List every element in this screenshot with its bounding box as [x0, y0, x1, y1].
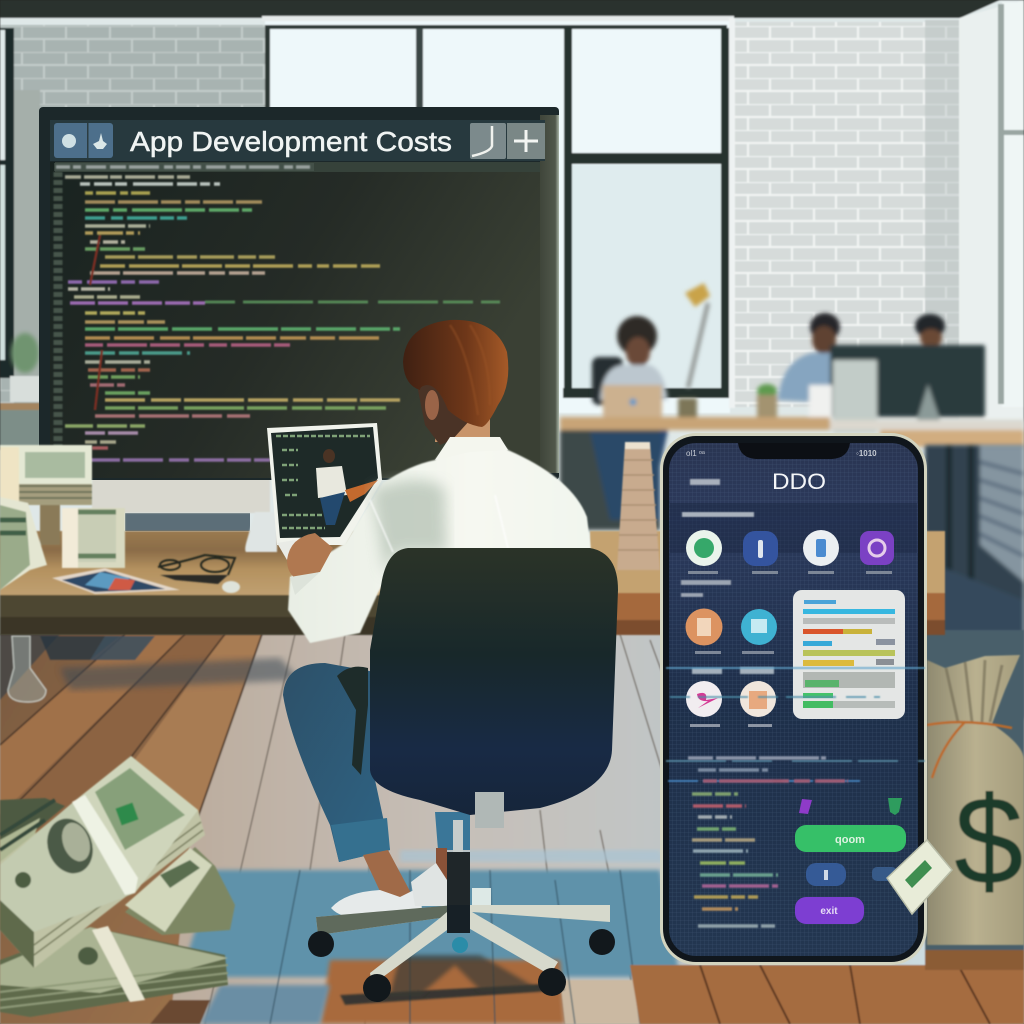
paper cup stack — [617, 442, 660, 570]
third coworker — [915, 314, 945, 347]
chair arm — [337, 667, 368, 775]
darker wood planks left — [0, 634, 262, 1024]
far monitor — [830, 345, 985, 417]
money stacks foreground — [0, 756, 235, 1017]
middle stack — [125, 847, 235, 935]
blue button — [806, 863, 846, 886]
main desk — [0, 531, 945, 635]
smartphone: ◦1010 — [856, 449, 877, 458]
monitor with code editor — [39, 107, 559, 480]
banknote leaning on phone — [887, 840, 952, 914]
person from behind — [267, 320, 618, 1002]
back dark stack — [0, 798, 65, 840]
feature badges row — [799, 798, 902, 815]
monitor stand — [92, 478, 277, 552]
desk lamp — [685, 283, 710, 388]
shoes — [331, 887, 422, 918]
title bar — [50, 120, 545, 161]
scan glitch lines — [666, 668, 925, 781]
green button — [795, 825, 906, 852]
head — [418, 380, 470, 445]
magazine, glasses and mouse — [52, 555, 240, 594]
green button: qoom — [835, 834, 865, 846]
window shadow band — [60, 658, 300, 690]
code text — [56, 167, 500, 465]
right lower wall and dark floor — [925, 445, 1024, 720]
blue shadow on floor — [180, 870, 680, 977]
left pillar — [14, 90, 40, 410]
phone code lines — [688, 758, 848, 926]
top stack — [0, 756, 205, 968]
ceiling — [0, 0, 1000, 18]
cup and plant — [678, 398, 697, 417]
bottom stack — [0, 927, 228, 1017]
shirt — [288, 438, 592, 643]
wood floor — [0, 630, 1024, 1024]
money bag — [927, 655, 1024, 945]
hands — [287, 533, 333, 578]
coworker right — [778, 313, 840, 403]
sunlit orange wood — [320, 960, 565, 1024]
purple button: exit — [820, 906, 838, 917]
smartphone — [660, 433, 927, 965]
cost chart card — [793, 590, 905, 719]
far desk — [560, 417, 830, 430]
left window sliver — [0, 28, 14, 378]
window — [262, 16, 735, 413]
neck — [435, 410, 490, 442]
legs — [283, 663, 390, 862]
hair — [403, 320, 508, 427]
right white wall and window — [959, 0, 1024, 420]
left brick wall — [0, 25, 265, 410]
status bar: ol1 ᵒᵃ — [686, 449, 706, 458]
chair post — [308, 792, 615, 1002]
chair shadow — [340, 983, 565, 1005]
heading: App Development Costs — [130, 126, 452, 157]
background coworkers and far desk — [560, 283, 1024, 530]
collar — [435, 437, 508, 460]
chair back — [370, 548, 618, 815]
cash stacks on desk — [0, 445, 125, 590]
laptop — [267, 423, 382, 577]
app title: DDO — [772, 469, 826, 494]
right brick wall — [735, 22, 925, 407]
app icons — [681, 530, 894, 727]
coworker left — [590, 316, 668, 490]
plank lines — [0, 634, 262, 850]
dollar sign: $ — [954, 772, 1024, 911]
glass bottle — [8, 636, 46, 702]
brick strip under monitor — [125, 513, 250, 531]
foreground right wood — [630, 965, 1024, 1024]
purple button — [795, 897, 864, 924]
ankle — [363, 850, 412, 902]
